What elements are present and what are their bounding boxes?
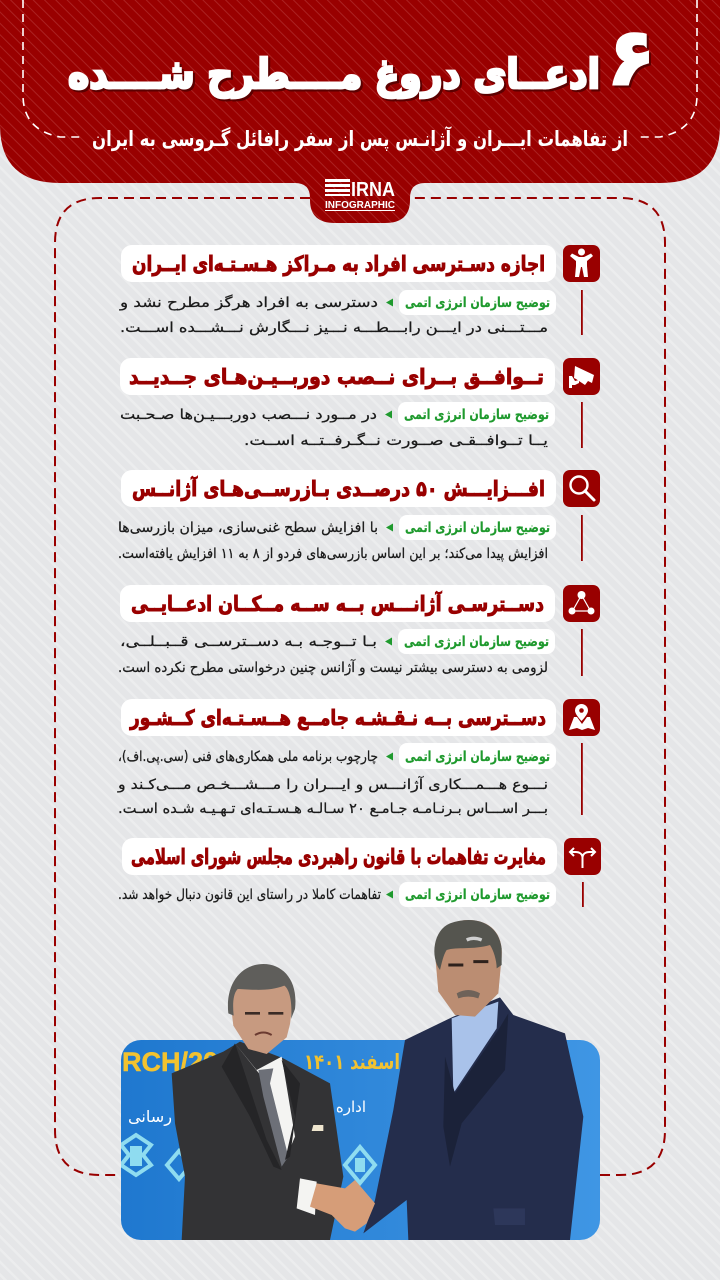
source pill 4: توضیح سازمان انرژی اتمی — [404, 634, 549, 650]
item 2 — [120, 358, 600, 449]
description 4: بـا تــوجـه بـه دســترســی قــبــلــی، — [120, 634, 377, 650]
blue backdrop: رسانی — [128, 1107, 172, 1127]
title pill 2 — [120, 358, 555, 395]
marker 5 — [386, 752, 393, 760]
description 3: افزایش پیدا می‌کند؛ بر این اساس بازرسی‌های فردو از ۸ به ۱۱ افزایش یافته‌است. — [118, 546, 548, 562]
title pill 6 — [122, 838, 557, 875]
connector 3 — [581, 515, 583, 561]
right man — [363, 920, 583, 1240]
description 2: در مــورد نـــصب دوربـــیـن‌ها صـحـبت — [120, 407, 377, 423]
description 1: دسترسی به افراد هرگز مطرح نشد و — [119, 294, 378, 311]
title: ادعــای دروغ مــــطرح شــــده — [70, 52, 602, 101]
icon: map pin — [563, 699, 600, 736]
header banner — [0, 0, 720, 223]
title pill 2: تــوافــق بــرای نــصب دوربــیـن‌هـای جــدیــد — [129, 365, 544, 389]
blue backdrop — [121, 1040, 600, 1240]
description 1 — [119, 294, 548, 336]
title — [68, 13, 657, 105]
marker 3 — [386, 524, 393, 532]
title pill 3 — [121, 470, 556, 507]
source pill 2: توضیح سازمان انرژی اتمی — [404, 407, 549, 423]
item 6 — [118, 838, 601, 907]
blue backdrop: RCH/20 — [122, 1047, 218, 1077]
description 3 — [118, 520, 548, 562]
marker 1 — [386, 298, 393, 306]
left man — [172, 964, 343, 1240]
description 5: بـــر اســـاس بـرنـامـه جـامـع ۲۰ سـالـه هـسـتـه‌ای تـهـیـه شـده اسـت. — [118, 801, 548, 817]
blue backdrop: اداره — [336, 1098, 366, 1116]
IRNA logo: INFOGRAPHIC — [325, 199, 395, 211]
source pill 6 — [399, 882, 556, 907]
title: ۶ — [607, 13, 655, 103]
description 5 — [117, 749, 548, 817]
description 6: تفاهمات کاملا در راستای این قانون دنبال خواهد شد. — [118, 887, 381, 903]
connector 2 — [581, 402, 583, 448]
title: ۶ — [609, 15, 657, 105]
icon: accessibility person — [563, 245, 600, 282]
item 5 — [117, 699, 600, 817]
icon: magnifier — [563, 470, 600, 507]
IRNA logo — [325, 179, 395, 211]
source pill 6: توضیح سازمان انرژی اتمی — [405, 887, 550, 903]
description 5: نـــوع هـــمـــکاری آژانـــس و ایـــران را مـــشـــخـص مـــی‌کـند و — [117, 776, 548, 793]
icon: security camera — [563, 358, 600, 395]
title pill 3: افـــزایـــش ۵۰ درصــدی بـازرســی‌هـای آژانــس — [132, 476, 545, 501]
marker 6 — [386, 890, 393, 898]
connector 5 — [581, 743, 583, 815]
description 4 — [118, 634, 548, 676]
IRNA logo: IRNA — [351, 179, 395, 201]
icon: network triangle — [563, 585, 600, 622]
item 4 — [118, 585, 600, 676]
title: ادعــای دروغ مــــطرح شــــده — [68, 50, 600, 99]
source pill 2 — [398, 402, 555, 427]
description 4: لزومی به دسترسی بیشتر نیست و آژانس چنین درخواستی مطرح نکرده است. — [118, 659, 548, 676]
description 2 — [120, 407, 548, 449]
marker 4 — [385, 638, 392, 646]
source pill 1 — [399, 290, 556, 315]
title pill 5: دســترسی بــه نـقـشـه جامــع هــسـتـه‌ای کــشـور — [129, 706, 546, 730]
description 5: چارچوب برنامه ملی همکاری‌های فنی (سی.پی.اف)، — [118, 749, 378, 765]
connector 4 — [581, 629, 583, 676]
description 2: یــا تــوافــقـی صــورت نــگـرفــتــه اســت. — [244, 432, 548, 449]
item 1 — [119, 245, 600, 336]
handshake — [310, 1180, 375, 1232]
source pill 4 — [398, 629, 555, 654]
title pill 4: دســترسـی آژانـــس بــه ســه مــکــان ادعــایــی — [131, 591, 544, 616]
title pill 6: مغایرت تفاهمات با قانون راهبردی مجلس شورای اسلامی — [131, 845, 546, 869]
title pill 5 — [121, 699, 556, 736]
connector 6 — [582, 882, 584, 907]
source pill 3: توضیح سازمان انرژی اتمی — [405, 520, 550, 536]
description 3: با افزایش سطح غنی‌سازی، میزان بازرسی‌ها — [118, 520, 378, 536]
connector 1 — [581, 290, 583, 335]
item 3 — [118, 470, 600, 562]
icon: split arrows — [564, 838, 601, 875]
description 1: مـــتـــنی در ایـــن رابـــطـــه نـــیز نـــگارش نـــشـــده اســـت. — [120, 319, 548, 336]
blue backdrop: اسفند ۱۴۰۱ — [304, 1050, 400, 1074]
source pill 5: توضیح سازمان انرژی اتمی — [405, 749, 550, 765]
marker 2 — [385, 410, 392, 418]
source pill 3 — [399, 515, 556, 540]
source pill 1: توضیح سازمان انرژی اتمی — [405, 295, 550, 311]
title pill 1: اجازه دسـترسی افراد به مـراکز هـسـتـه‌ای ایــران — [132, 252, 545, 276]
title pill 4 — [120, 585, 555, 622]
photo: handshake of two officials — [121, 920, 600, 1240]
content dashed frame — [55, 198, 665, 1175]
source pill 5 — [399, 743, 556, 769]
title pill 1 — [121, 245, 556, 282]
